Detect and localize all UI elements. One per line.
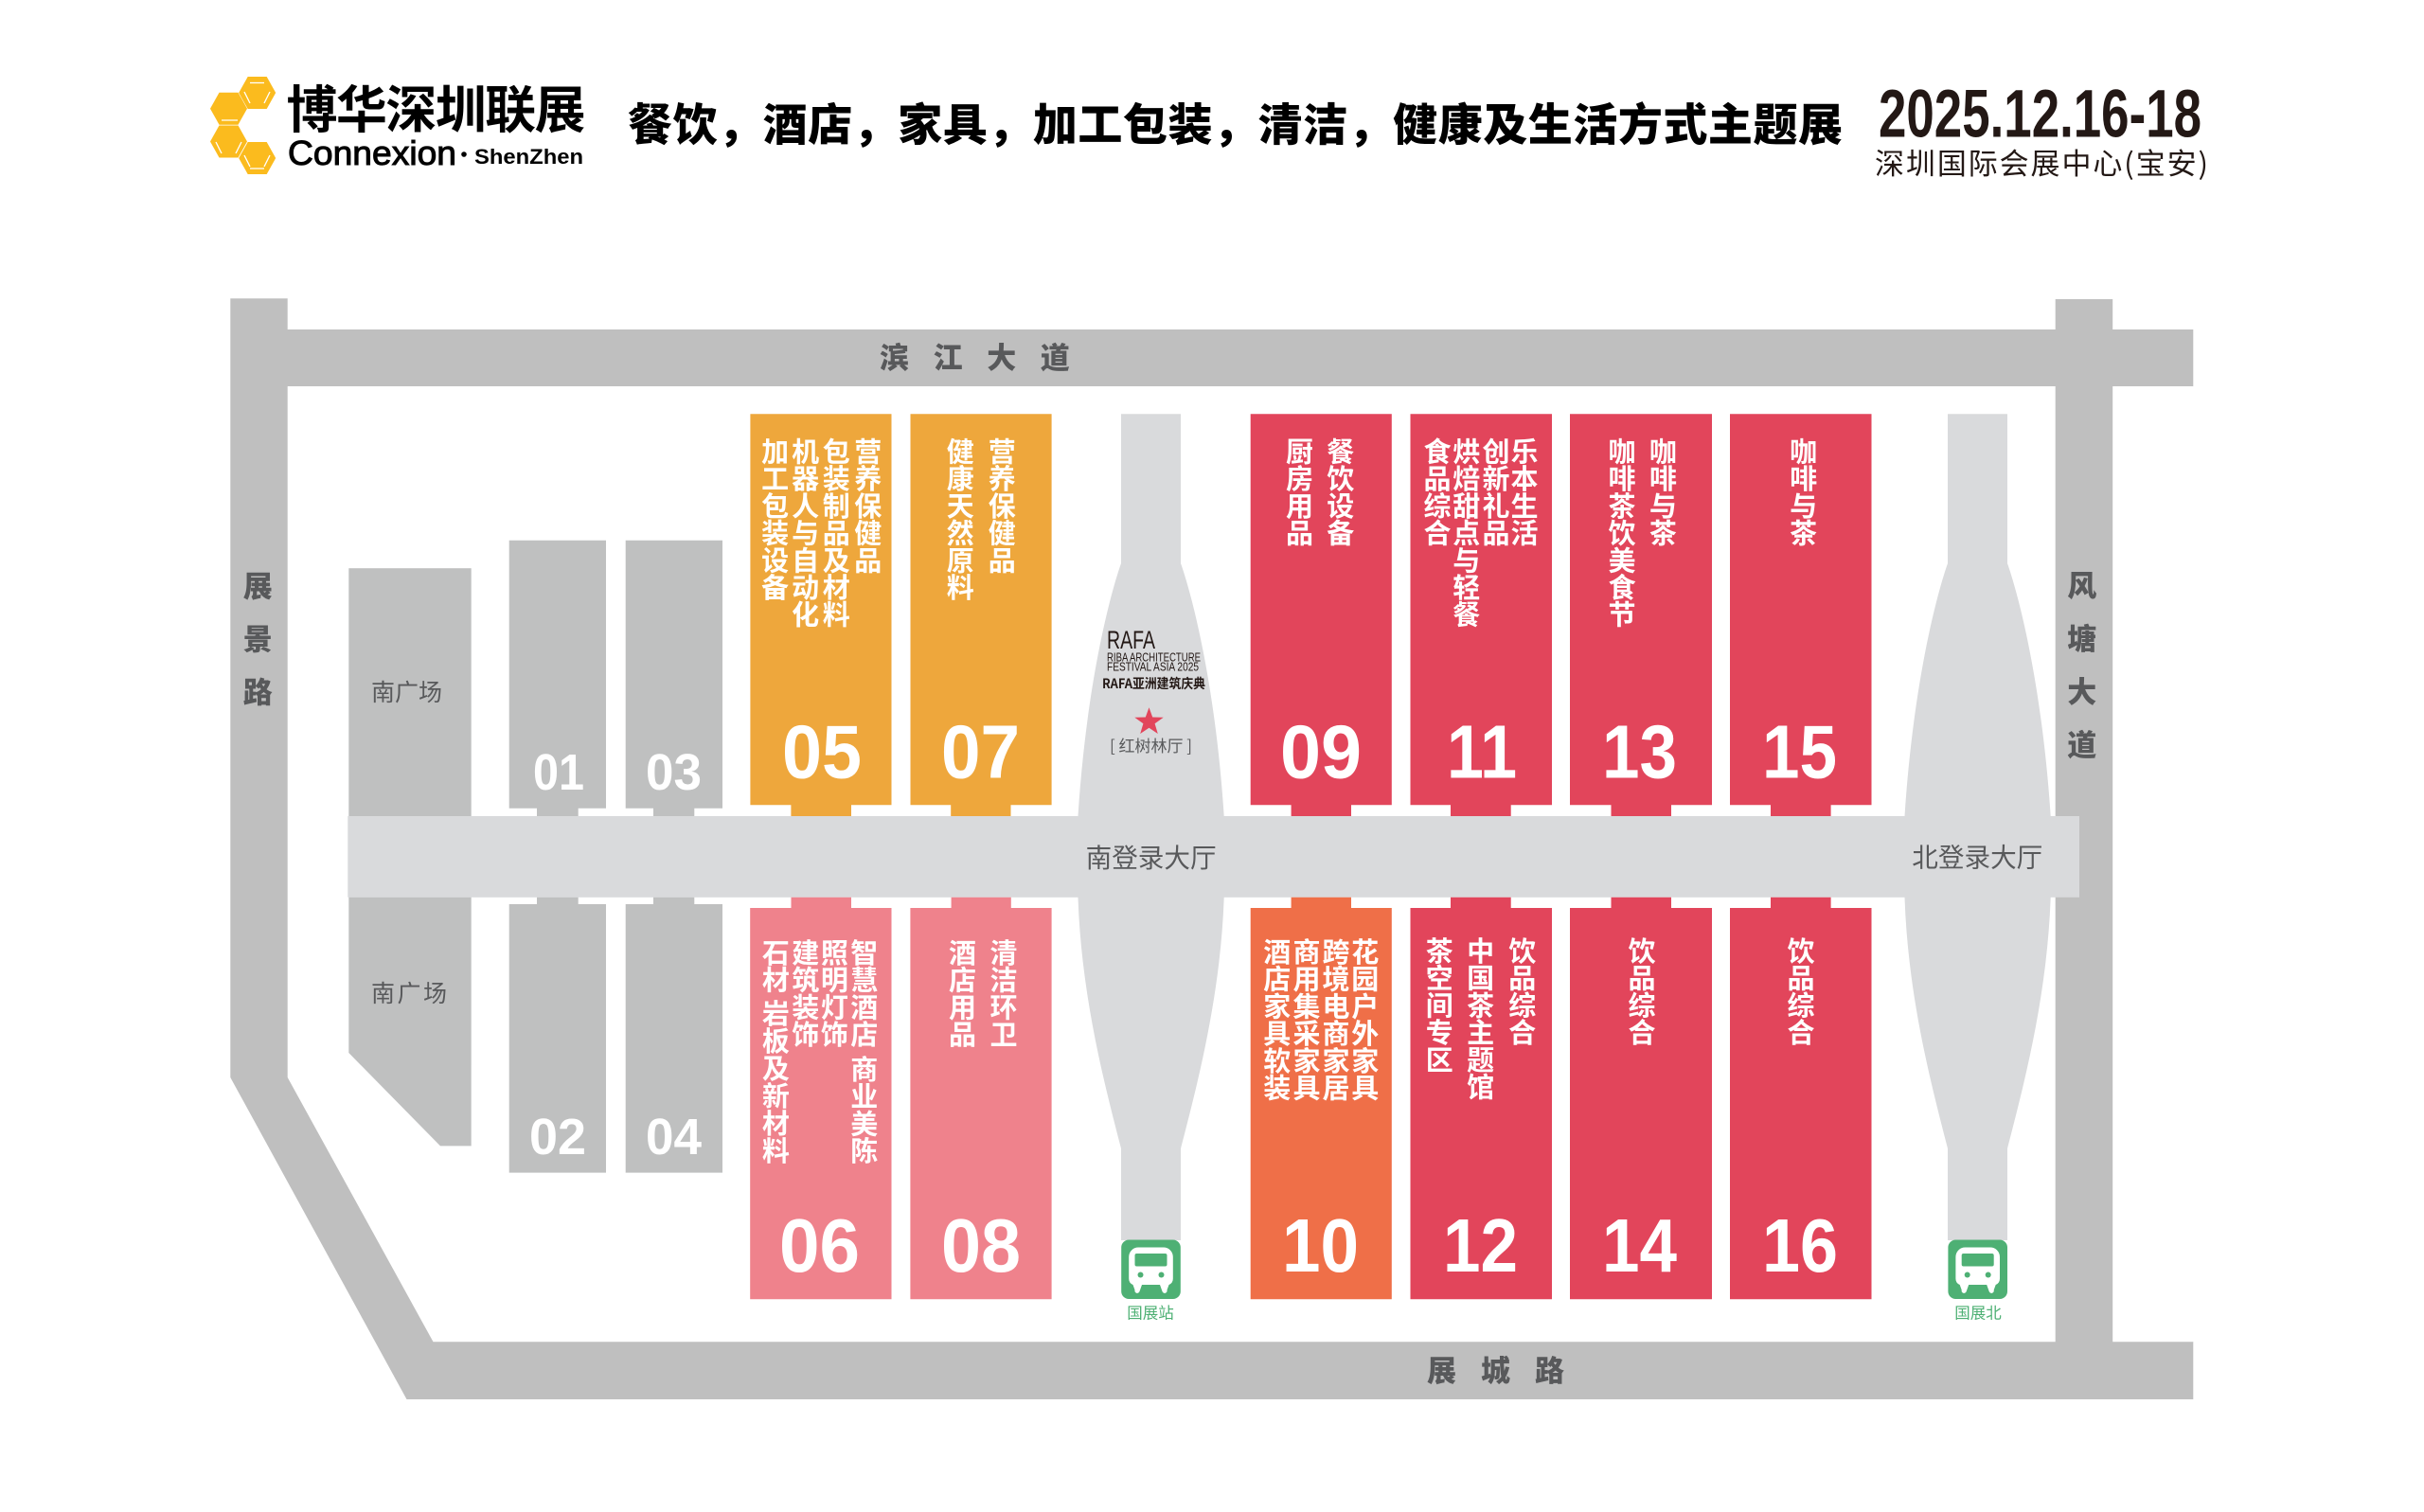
RAFA event logo block: FESTIVAL ASIA 2025: [1107, 661, 1199, 674]
hall 11: 创新礼品: [1476, 437, 1516, 546]
north lobby hall shape: [1903, 414, 2053, 1240]
icon: red star: [1134, 707, 1164, 734]
number 12: 12: [1443, 1203, 1518, 1288]
hall 05: [750, 414, 892, 816]
hall 06: 照明灯饰: [814, 939, 854, 1047]
hall 06 categories: 智慧酒店: [845, 938, 884, 1047]
plaza label: 南广场: [371, 674, 442, 708]
hall 05: 包装制品及材料: [816, 437, 856, 628]
logo city: ShenZhen: [474, 145, 583, 169]
logo: Connexion ShenZhen: [210, 68, 585, 174]
hall 14: [1570, 898, 1712, 1299]
hall 16 categories: 饮品综合: [1781, 936, 1821, 1045]
hall 09 categories: 餐饮设备: [1321, 437, 1361, 546]
hall 05: 加工包装设备: [756, 437, 795, 600]
number 08: 08: [941, 1203, 1021, 1288]
number 05: 05: [782, 710, 862, 793]
hall 07 categories: 营养保健品: [982, 437, 1022, 574]
hall 15: [1730, 414, 1871, 816]
number 15: 15: [1762, 710, 1837, 793]
number 01: 01: [533, 744, 584, 801]
plaza label: 南广场: [371, 975, 450, 1009]
hall 10: [1251, 898, 1392, 1299]
logo name Chinese: 博华深圳联展: [286, 68, 585, 143]
label: 国展北: 国展北: [1954, 1301, 2002, 1324]
number 10: 10: [1282, 1203, 1359, 1288]
number 14: 14: [1602, 1203, 1677, 1288]
hall 01: [509, 541, 606, 816]
hall 07: [911, 414, 1052, 816]
hall 06: [750, 898, 892, 1299]
hall 03: [626, 541, 722, 816]
south lobby hall shape: [1076, 414, 1225, 1240]
road label: 展景路: 展景路: [237, 571, 279, 730]
number 06: 06: [779, 1203, 860, 1288]
hall 11: 食品综合: [1417, 437, 1457, 546]
RAFA event logo block: [1102, 626, 1205, 693]
upper south plaza: [348, 568, 472, 816]
label: 国展站: 国展站: [1127, 1301, 1174, 1324]
hall 05: 机器人与自动化: [786, 437, 826, 628]
hall 05 categories: 营养保健品: [848, 437, 888, 574]
roads: [230, 298, 2193, 1399]
hall 15 categories: 咖啡与茶: [1784, 437, 1824, 547]
hall 10 categories: 花园户外家具: [1346, 937, 1385, 1101]
RAFA event logo block: RAFA亚洲建筑庆典: [1102, 674, 1205, 693]
hall 06: 岩板及新材料: [756, 999, 795, 1165]
hall 14 categories: 饮品综合: [1622, 936, 1662, 1045]
logo dot: [461, 151, 467, 157]
number 03: 03: [646, 744, 702, 801]
icon: bus station 国展北: [1948, 1240, 2007, 1299]
number 09: 09: [1280, 710, 1362, 793]
hall 09: 厨房用品: [1280, 437, 1320, 546]
hall 02: [509, 898, 606, 1173]
hall 06: 商业美陈: [845, 1055, 884, 1164]
hall 11: 烘焙甜点与轻餐: [1447, 437, 1487, 628]
hall 11 categories: 乐本生活: [1505, 437, 1544, 546]
hall 08: 酒店用品: [943, 938, 983, 1047]
logo name English: Connexion: [288, 133, 456, 172]
central corridor: [348, 816, 2079, 898]
hall 12: [1411, 898, 1552, 1299]
number 02: 02: [529, 1109, 586, 1165]
hall 10: 酒店家具软装: [1257, 937, 1297, 1101]
number 13: 13: [1602, 710, 1677, 793]
hall 07: 健康天然原料: [940, 437, 980, 600]
icon: bus station 国展站: [1121, 1240, 1181, 1299]
number 16: 16: [1762, 1203, 1838, 1288]
road label: 展城路: 展城路: [1427, 1347, 1589, 1390]
hall 13 categories: 咖啡与茶: [1643, 437, 1683, 547]
hall 12 categories: 饮品综合: [1503, 936, 1542, 1045]
hall 11: [1411, 414, 1552, 816]
hall 10: 跨境电商家居: [1316, 937, 1356, 1101]
hall 12: 中国茶主题馆: [1461, 936, 1501, 1100]
lower south plaza: [348, 898, 472, 1146]
label: 红树林厅: [ 红树林厅 ]: [1110, 733, 1192, 756]
number 04: 04: [646, 1109, 702, 1165]
hall 10: 商用集采家具: [1287, 937, 1327, 1101]
number 11: 11: [1447, 710, 1517, 793]
hall 04: [626, 898, 722, 1173]
hall 08: [910, 898, 1052, 1299]
hall 13: [1570, 414, 1712, 816]
venue: 深圳国际会展中心(宝安): [1875, 140, 2208, 183]
hall 06: 石材: [756, 939, 795, 993]
hall 16: [1730, 898, 1871, 1299]
RAFA event logo block: RIBA ARCHITECTURE: [1107, 650, 1201, 664]
title: show themes: 餐饮，酒店，家具，加工包装，清洁，健康及生活方式主题展: [628, 89, 1843, 153]
road label: 滨江大道: 滨江大道: [880, 334, 1094, 377]
number 07: 07: [941, 710, 1020, 793]
hall 06: 建筑装饰: [786, 938, 826, 1047]
RAFA event logo block: RAFA: [1107, 626, 1155, 654]
road label: 风塘大道: 风塘大道: [2060, 570, 2103, 782]
date: 2025.12.16-18: [1879, 78, 2201, 151]
hall 13: 咖啡茶饮美食节: [1602, 437, 1642, 628]
label: north lobby: 北登录大厅: [1912, 837, 2042, 875]
label: south lobby: 南登录大厅: [1086, 837, 1217, 875]
hall 08 categories: 清洁环卫: [984, 938, 1024, 1047]
icon: honeycomb hexagons: [210, 77, 276, 174]
hall 12: 茶空间专区: [1419, 936, 1459, 1073]
hall 09: [1251, 414, 1392, 816]
